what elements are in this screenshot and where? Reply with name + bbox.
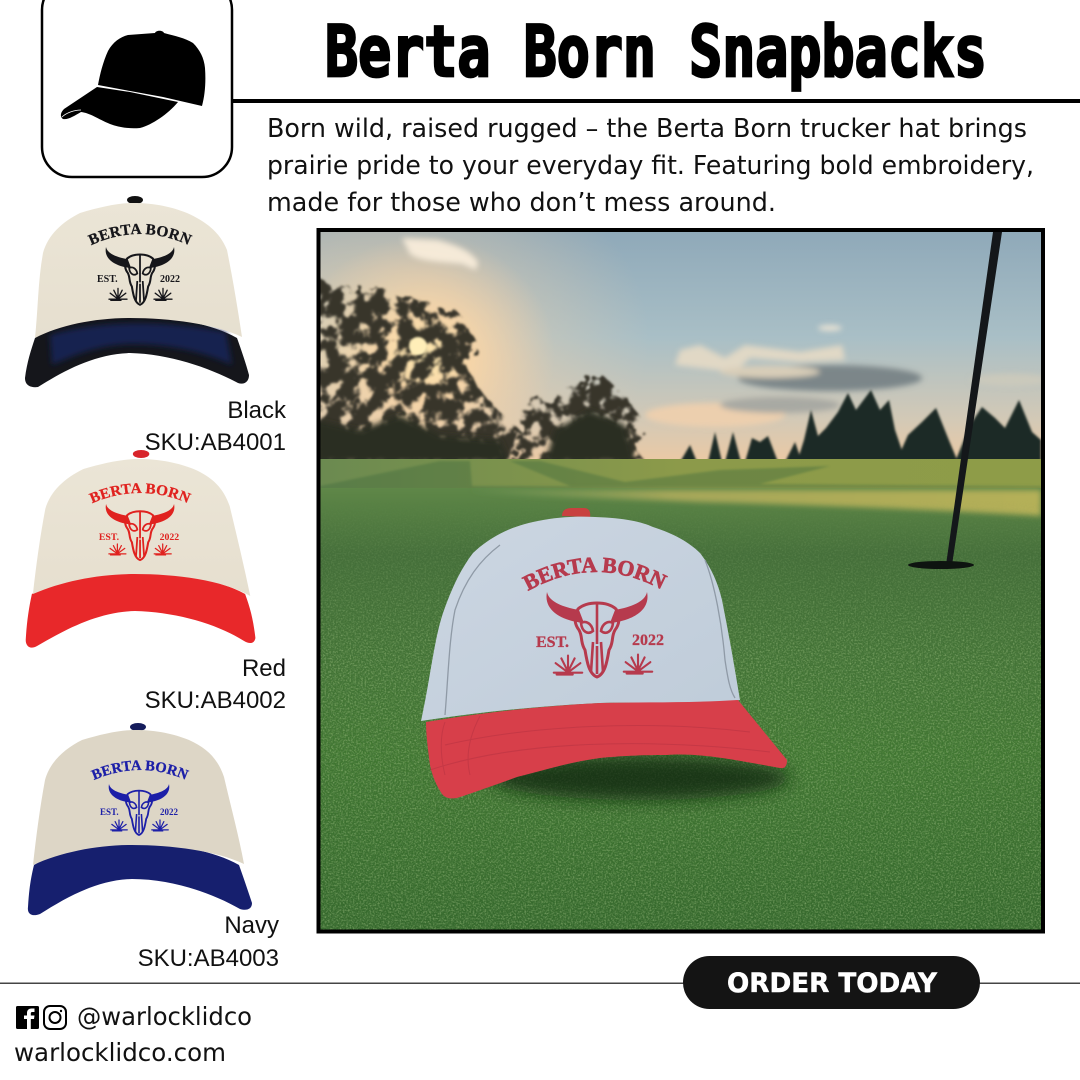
cup hole [908,561,974,569]
order today button [683,956,980,1009]
red label: Red [242,655,286,682]
hat: navy brim [28,723,252,916]
icon: facebook [16,1006,39,1029]
tree foliage with sky showing through [320,277,647,459]
photo scene: golf green at sunset [320,232,1041,930]
brim stitching [430,716,770,775]
lawn [320,488,1041,930]
icon: instagram [44,1006,66,1029]
hat logo: 2022 [160,532,179,543]
fairway shadows [320,461,1041,490]
hat logo [90,760,190,836]
navy label: Navy [224,912,279,939]
hat logo: BERTA BORN [88,483,192,504]
hat shadow [490,756,790,800]
hat: red brim [26,450,256,648]
hat logo: BERTA BORN [521,557,668,592]
black label [145,397,287,456]
black label: SKU:AB4001 [145,429,286,456]
order today button: ORDER TODAY [727,968,937,999]
crown seams [445,545,735,715]
hat: black brim [25,196,249,388]
hat logo: EST. [536,634,569,651]
main photo panel [316,228,1045,934]
hat crown [421,517,740,721]
hat logo: 2022 [160,807,178,817]
grass texture [320,488,1041,930]
navy label: SKU:AB4003 [138,945,279,972]
product card: red hat [26,450,286,714]
website: warlocklidco.com [14,1038,226,1067]
description text [267,114,1034,218]
hat logo: 2022 [632,632,664,649]
black label: Black [227,397,287,424]
hat logo [88,483,192,562]
product card: navy hat [28,723,279,972]
fairway [320,459,1041,491]
hat logo: EST. [100,807,119,817]
description text: prairie pride to your everyday fit. Featuring bold embroidery, [267,151,1034,181]
red label [145,655,286,714]
pine trees [680,390,1041,462]
sky [320,232,1041,467]
sun glow [320,250,538,427]
red label: SKU:AB4002 [145,687,286,714]
navy label [138,912,279,972]
product card: black hat [25,196,287,456]
flag pole [946,232,1002,565]
wide warm haze [320,232,610,424]
hat logo [521,557,668,678]
description text: made for those who don’t mess around. [267,188,776,218]
hat button [562,508,590,517]
hat logo: EST. [97,274,118,285]
hat logo: EST. [99,532,119,543]
handle: @warlocklidco [77,1002,252,1031]
description text: Born wild, raised rugged – the Berta Born trucker hat brings [267,114,1027,144]
sun [409,337,427,355]
tree trunks and dense lower canopy [316,410,635,462]
clouds [402,238,1050,427]
hat logo [87,224,192,306]
hat brim [426,700,787,798]
photo frame [318,230,1043,932]
hat logo: BERTA BORN [90,760,190,780]
logo panel with cap icon [42,0,232,177]
header rule [233,99,1080,103]
big photo hat [421,508,787,798]
footer rule [0,982,1080,984]
hat logo: BERTA BORN [87,224,192,246]
lit fringe [470,490,1041,516]
icon: black baseball cap [61,31,205,128]
social handles and website [14,1002,252,1067]
hat logo: 2022 [160,274,180,285]
